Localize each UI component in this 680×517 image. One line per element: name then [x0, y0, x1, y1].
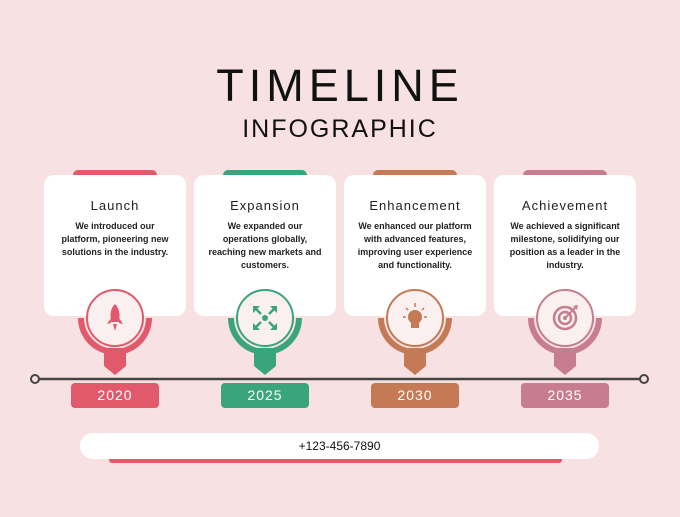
year: 2035: 2035 [547, 387, 583, 403]
year: 2020: 2020 [97, 387, 133, 403]
card: Achievement [494, 175, 636, 316]
card: Expansion: We expanded our operations globally, reaching new markets and customers. [208, 221, 322, 270]
card: Launch: We introduced our platform, pioneering new solutions in the industry. [61, 221, 168, 257]
tab: 2035 [523, 170, 607, 180]
year: 2025 [221, 383, 309, 408]
phone pill [80, 433, 599, 459]
phone pill: +123-456-7890 [299, 439, 380, 453]
marker: 2030 bulb [378, 290, 452, 375]
tab: 2020 [73, 170, 157, 180]
year: 2020 [71, 383, 159, 408]
card: Expansion [194, 175, 336, 316]
marker: 2020 rocket [78, 290, 152, 375]
timeline line [31, 375, 648, 383]
year: 2025: 2025 [247, 387, 283, 403]
card: Enhancement [344, 175, 486, 316]
card: Achievement: Achievement [522, 198, 608, 213]
card: Launch: Launch [91, 198, 139, 213]
tab: 2030 [373, 170, 457, 180]
year: 2030: 2030 [397, 387, 433, 403]
card: Achievement: We achieved a significant milestone, solidifying our position as a leader in the industry. [510, 221, 620, 270]
phone bar underline [109, 457, 562, 463]
marker: 2025 expand [228, 290, 302, 375]
year: 2030 [371, 383, 459, 408]
title: TIMELINE [216, 60, 464, 111]
subtitle: INFOGRAPHIC [242, 115, 438, 143]
card: Enhancement: Enhancement [369, 198, 461, 213]
card: Expansion: Expansion [230, 198, 300, 213]
card: Enhancement: We enhanced our platform with advanced features, improving user experience and functionality. [358, 221, 472, 270]
marker: 2035 target [528, 290, 602, 375]
year: 2035 [521, 383, 609, 408]
card: Launch [44, 175, 186, 316]
tab: 2025 [223, 170, 307, 180]
